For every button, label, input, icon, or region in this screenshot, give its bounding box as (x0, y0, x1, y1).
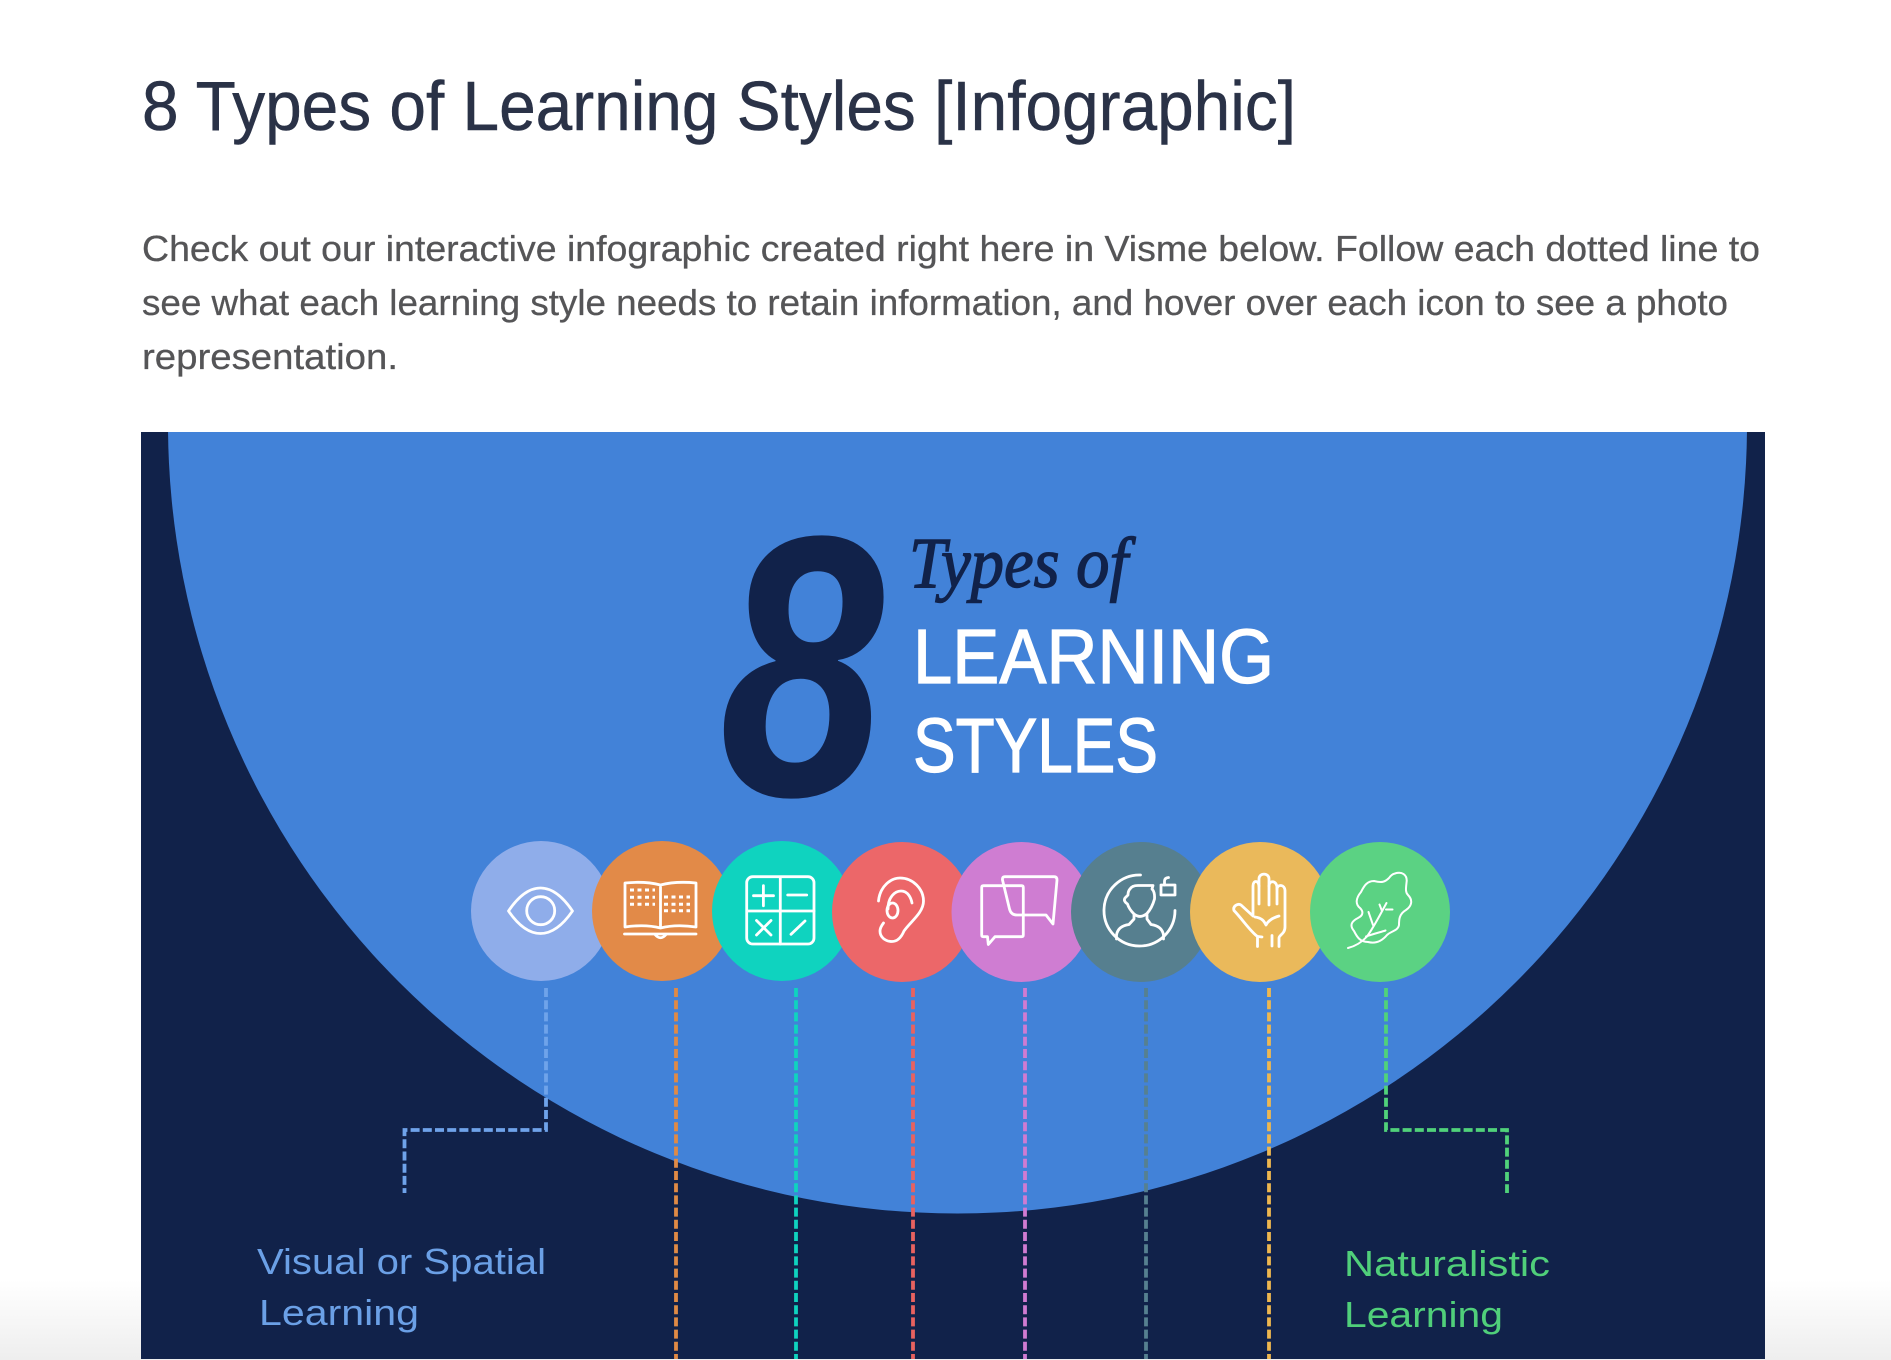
label: visual or spatial learning: Learning (259, 1292, 419, 1333)
panel background (141, 432, 1765, 1359)
icon: book circle (592, 841, 732, 981)
intro paragraph: representation. (142, 336, 398, 377)
learning: LEARNING (913, 614, 1274, 700)
label: naturalistic learning: Learning (1344, 1294, 1503, 1335)
infographic title (720, 458, 1274, 874)
numeral 8: 8 (720, 458, 886, 874)
intro paragraph: see what each learning style needs to retain information, and hover over each icon to see a photo (142, 282, 1728, 323)
icon: person with lock circle (1071, 842, 1211, 982)
intro paragraph: Check out our interactive infographic created right here in Visme below. Follow each dotted line to (142, 228, 1760, 269)
styles: STYLES (913, 703, 1158, 789)
large blue semicircle (168, 432, 1747, 1214)
icon: calculator circle (712, 841, 852, 981)
dashed connector lines (404, 988, 1507, 1359)
panel: infographic (141, 432, 1765, 1359)
label: visual or spatial learning (257, 1241, 546, 1333)
intro paragraph (142, 228, 1760, 377)
label: visual or spatial learning: Visual or Spatial (257, 1241, 546, 1282)
icon: speech bubbles circle (952, 842, 1092, 982)
label: naturalistic learning (1344, 1243, 1550, 1335)
icon: eye circle (471, 841, 611, 981)
icon: leaf circle (1310, 842, 1450, 982)
label: naturalistic learning: Naturalistic (1344, 1243, 1550, 1284)
icon: hand circle (1190, 842, 1330, 982)
icon: ear circle (832, 842, 972, 982)
types of: Types of (909, 523, 1136, 603)
page heading: 8 Types of Learning Styles [Infographic] (142, 67, 1296, 145)
